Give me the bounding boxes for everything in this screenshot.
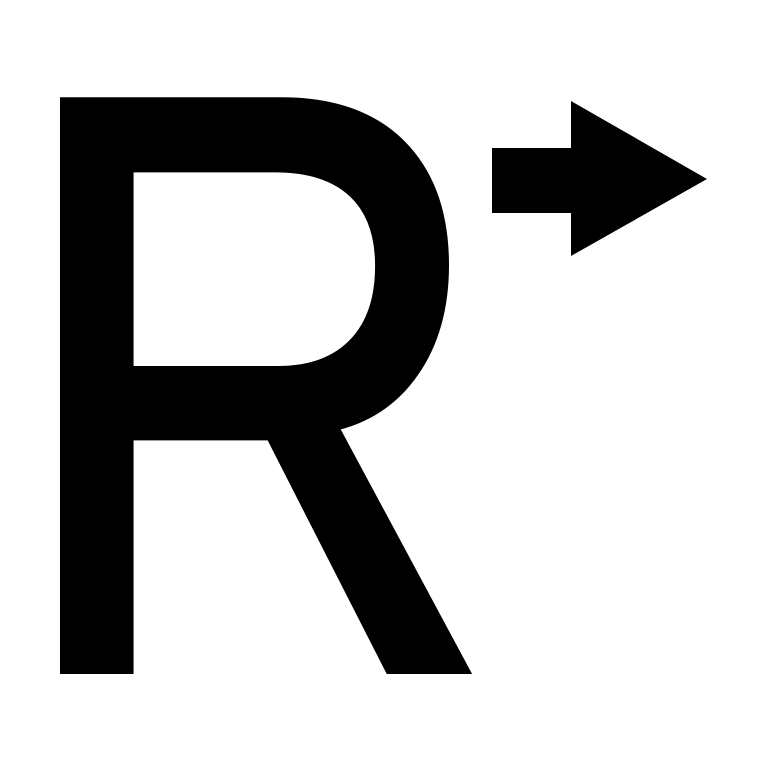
arrow pointing right <box>492 101 707 256</box>
